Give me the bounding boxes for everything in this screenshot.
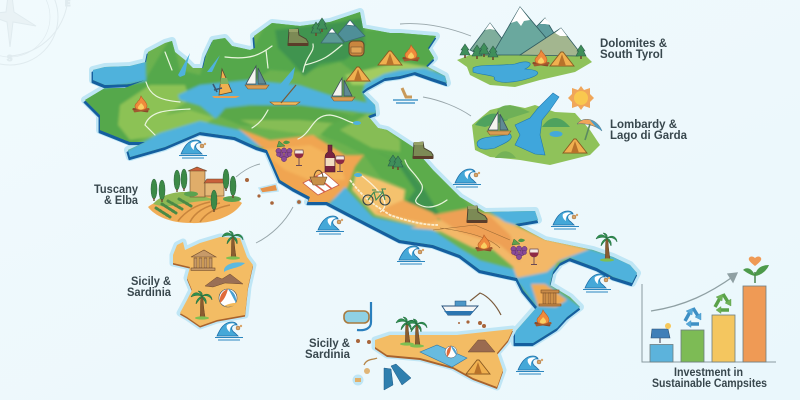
label: Sicily: Sicily & bbox=[309, 338, 350, 350]
Lazio cycling trail bbox=[350, 180, 438, 225]
label: Tuscany bbox=[94, 184, 139, 207]
chart: investment in sustainable campsites bbox=[642, 256, 776, 390]
shrubs bbox=[184, 191, 241, 202]
small lake centre bbox=[354, 173, 362, 177]
island bbox=[472, 105, 600, 165]
label: Sardinia: Sardinia bbox=[127, 287, 172, 299]
icon: islets and mask strap bbox=[352, 358, 377, 386]
axes bbox=[642, 284, 776, 362]
icon: snorkel bbox=[344, 302, 371, 330]
Gargano / heel / toe blue bbox=[486, 211, 538, 227]
icon: campfire toe bbox=[534, 310, 552, 326]
panel: Tuscany scene bbox=[148, 167, 242, 223]
mountains bbox=[470, 7, 578, 56]
icon: sailboat east bbox=[331, 78, 355, 101]
icon: bicycle bbox=[363, 189, 390, 205]
island halo bbox=[173, 237, 253, 326]
label: Lombardy bbox=[610, 119, 688, 142]
beach towel bbox=[420, 345, 467, 367]
icon: wave Adriatic bbox=[551, 211, 579, 229]
icon: tents bbox=[346, 51, 402, 81]
icon: windsurf bbox=[212, 69, 240, 98]
rivers and paths bbox=[145, 44, 447, 207]
connector lines bbox=[236, 24, 471, 243]
vine rows bbox=[156, 199, 191, 217]
panel: Lombardy scene bbox=[472, 86, 602, 165]
icon: campfire south bbox=[475, 235, 493, 251]
trees bbox=[460, 43, 586, 60]
Elba and small islands bbox=[245, 178, 301, 205]
temple bbox=[191, 250, 216, 270]
icon: cypress trio bbox=[388, 155, 403, 170]
lake band bbox=[178, 80, 380, 119]
icon: flippers bbox=[384, 364, 411, 390]
umbrella bbox=[577, 119, 602, 140]
icon: sprout bbox=[743, 265, 769, 283]
field furrows bbox=[178, 202, 230, 222]
NW blue bbox=[88, 60, 146, 88]
growth arrow bbox=[651, 273, 737, 311]
icon: green recycle bbox=[715, 294, 731, 314]
beach ball bbox=[219, 289, 237, 307]
Adriatic strip bbox=[362, 68, 447, 110]
icon: campfire east bbox=[402, 45, 420, 61]
island land bbox=[375, 329, 513, 387]
Tuscany orange bbox=[238, 128, 364, 205]
icon: blue recycle bbox=[685, 308, 701, 328]
tent bbox=[550, 52, 574, 66]
chart title: Sustainable Campsites bbox=[652, 378, 767, 390]
Tyrrhenian blue bbox=[327, 187, 520, 285]
mountains bbox=[205, 274, 243, 287]
icon: sailboat bbox=[245, 66, 269, 89]
region borders bbox=[433, 225, 510, 248]
bars bbox=[650, 286, 766, 362]
icon: grapes south bbox=[511, 239, 527, 260]
land base bbox=[85, 12, 637, 343]
small pond bbox=[550, 131, 562, 137]
icon: campfire bbox=[132, 96, 150, 112]
chart title: Investment in bbox=[674, 367, 743, 379]
icons: northern Italy bbox=[132, 18, 420, 112]
label: Tuscany: & Elba bbox=[104, 195, 139, 207]
small lake north bbox=[353, 121, 361, 125]
lakes on map bbox=[178, 53, 295, 90]
sun bbox=[568, 86, 594, 110]
icon: trees bbox=[311, 18, 327, 36]
south orange bbox=[410, 213, 593, 278]
label: Dolomites bbox=[600, 38, 667, 61]
icon: grapes bbox=[276, 141, 292, 162]
east hill green bbox=[320, 112, 475, 215]
sailboat bbox=[487, 112, 511, 135]
volcano bbox=[468, 340, 495, 352]
side trail bbox=[362, 176, 385, 212]
beach ball bbox=[445, 346, 457, 358]
label: Tuscany: Tuscany bbox=[94, 184, 139, 196]
icon: solar panel bbox=[651, 323, 671, 343]
villa bbox=[188, 167, 225, 197]
island edge bbox=[173, 239, 253, 328]
island bbox=[457, 50, 592, 87]
label: Sardinia bbox=[127, 276, 172, 299]
palms bbox=[396, 317, 427, 348]
label: Dolomites: South Tyrol bbox=[600, 49, 663, 61]
icon: wine glass bbox=[295, 150, 303, 166]
icon: swimmer wave bbox=[393, 88, 418, 103]
hills bbox=[153, 192, 215, 207]
waves bbox=[179, 140, 611, 374]
island edge bbox=[375, 331, 513, 389]
palm north bbox=[222, 231, 243, 260]
Lazio orange bbox=[352, 172, 440, 232]
icons: southern Italy bbox=[475, 233, 617, 326]
icon: boot bbox=[288, 29, 308, 46]
label: Sicily bbox=[305, 338, 351, 361]
label: Sardinia: Sicily & bbox=[131, 276, 171, 288]
label: Sicily: Sardinia bbox=[305, 349, 351, 361]
icon: palm bbox=[596, 233, 617, 262]
small lakes bbox=[477, 134, 511, 149]
lake bbox=[224, 262, 245, 272]
icon: wave Sardinia bbox=[215, 322, 243, 340]
land bbox=[148, 195, 242, 223]
icon: wine bottle bbox=[325, 145, 335, 172]
icon: wave east bbox=[453, 169, 481, 187]
small islets bbox=[356, 339, 371, 344]
panel: Dolomites scene bbox=[457, 7, 592, 87]
island land bbox=[173, 237, 253, 326]
icon: kayak bbox=[270, 85, 300, 105]
tent bbox=[466, 360, 490, 374]
hills bbox=[475, 105, 570, 158]
palm south bbox=[191, 291, 212, 320]
icons: central Italy bbox=[276, 141, 488, 223]
icon: wine glass south bbox=[530, 249, 538, 264]
icon: mountains bbox=[321, 20, 365, 43]
coastal shadow bbox=[84, 14, 636, 345]
island halo bbox=[375, 329, 513, 387]
icon: wave Ionian bbox=[583, 274, 611, 292]
icon: compass rose bbox=[0, 0, 71, 65]
chart title bbox=[652, 367, 767, 390]
icon: wave west bbox=[397, 246, 425, 264]
icon: wave Sicily bbox=[516, 356, 544, 374]
icon: temple ruin bbox=[539, 290, 561, 306]
lake bbox=[473, 62, 538, 82]
icon: backpack bbox=[349, 41, 364, 56]
icon: wine glass 2 bbox=[336, 156, 344, 172]
campfire bbox=[532, 50, 550, 66]
label: Lombardy: Lago di Garda bbox=[610, 130, 688, 142]
icon: heart bbox=[749, 256, 761, 266]
icon: wave Ligurian bbox=[179, 140, 207, 158]
land zones bbox=[80, 5, 640, 345]
label: Lombardy: Lombardy & bbox=[610, 119, 677, 131]
snow bbox=[485, 7, 567, 36]
panel: Sardinia bbox=[173, 231, 253, 328]
icon: fishing boat bbox=[442, 293, 501, 328]
tent bbox=[563, 139, 587, 153]
icon: boot centre bbox=[412, 142, 434, 159]
icon: boot south bbox=[466, 206, 488, 223]
lake Garda bbox=[515, 93, 559, 155]
icon: picnic bbox=[303, 170, 339, 195]
Ligurian blue bbox=[128, 119, 263, 157]
cypresses bbox=[151, 169, 236, 212]
panel: Sicily bbox=[356, 317, 513, 389]
halo bbox=[85, 12, 637, 343]
label: Dolomites: Dolomites & bbox=[600, 38, 667, 50]
map of Italy bbox=[80, 5, 640, 345]
icon: wave Tyrrhenian bbox=[316, 216, 344, 234]
icon: compass rose: S bbox=[7, 54, 13, 63]
